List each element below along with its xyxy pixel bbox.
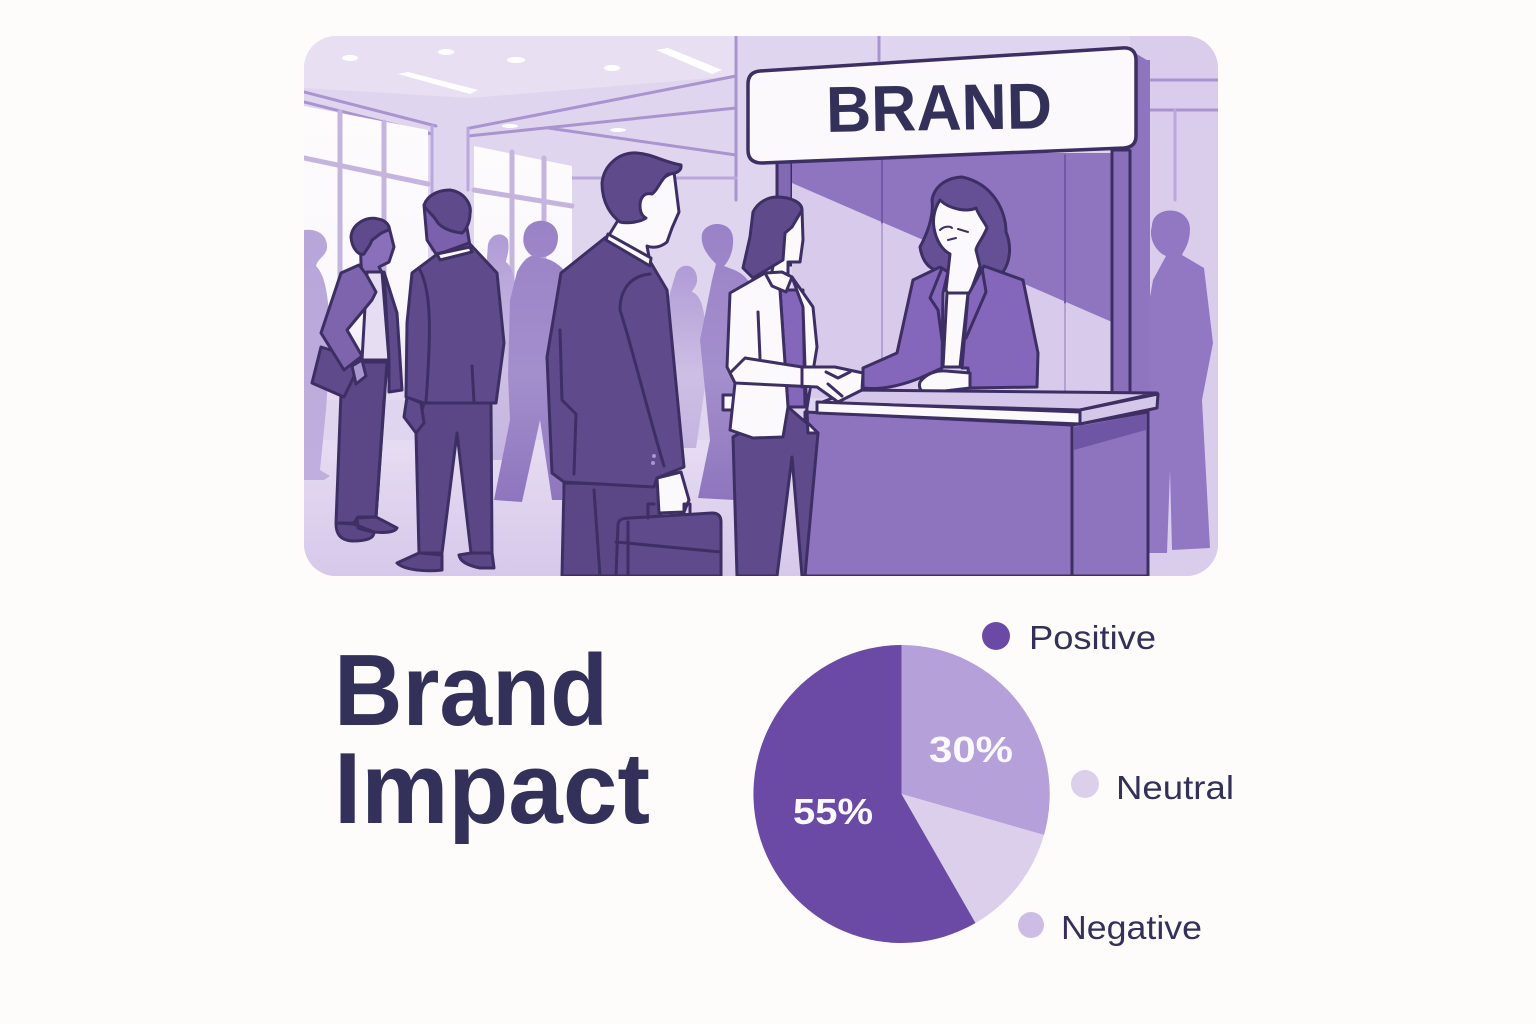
legend: Negative: Negative [1061,909,1202,946]
pie chart [753,645,1050,943]
legend: Neutral: Neutral [1116,769,1234,806]
booth sign [748,48,1150,163]
counter [805,390,1158,576]
ceiling lines and lights [304,36,1218,250]
heading: Brand Impact: Brand [334,635,608,747]
legend: Positive [982,619,1156,656]
pie chart: 55% [793,791,873,832]
heading: Brand Impact: Impact [334,733,650,845]
main man with briefcase [547,153,721,576]
windows [304,106,572,400]
legend: Positive: Positive [1029,619,1156,656]
woman in white jacket [723,197,863,576]
man with backpack [312,218,402,541]
legend: Neutral [1071,769,1234,806]
receptionist [863,177,1038,393]
infographic canvas [304,36,1232,946]
background man, right [1149,210,1213,553]
pie chart: 30% [929,729,1013,770]
man in suit, back view [397,190,504,571]
heading: Brand Impact [334,635,650,845]
background crowd silhouettes [304,221,750,502]
booth [777,60,1150,410]
panel: trade show illustration [304,36,1218,576]
booth sign: BRAND [825,69,1053,146]
